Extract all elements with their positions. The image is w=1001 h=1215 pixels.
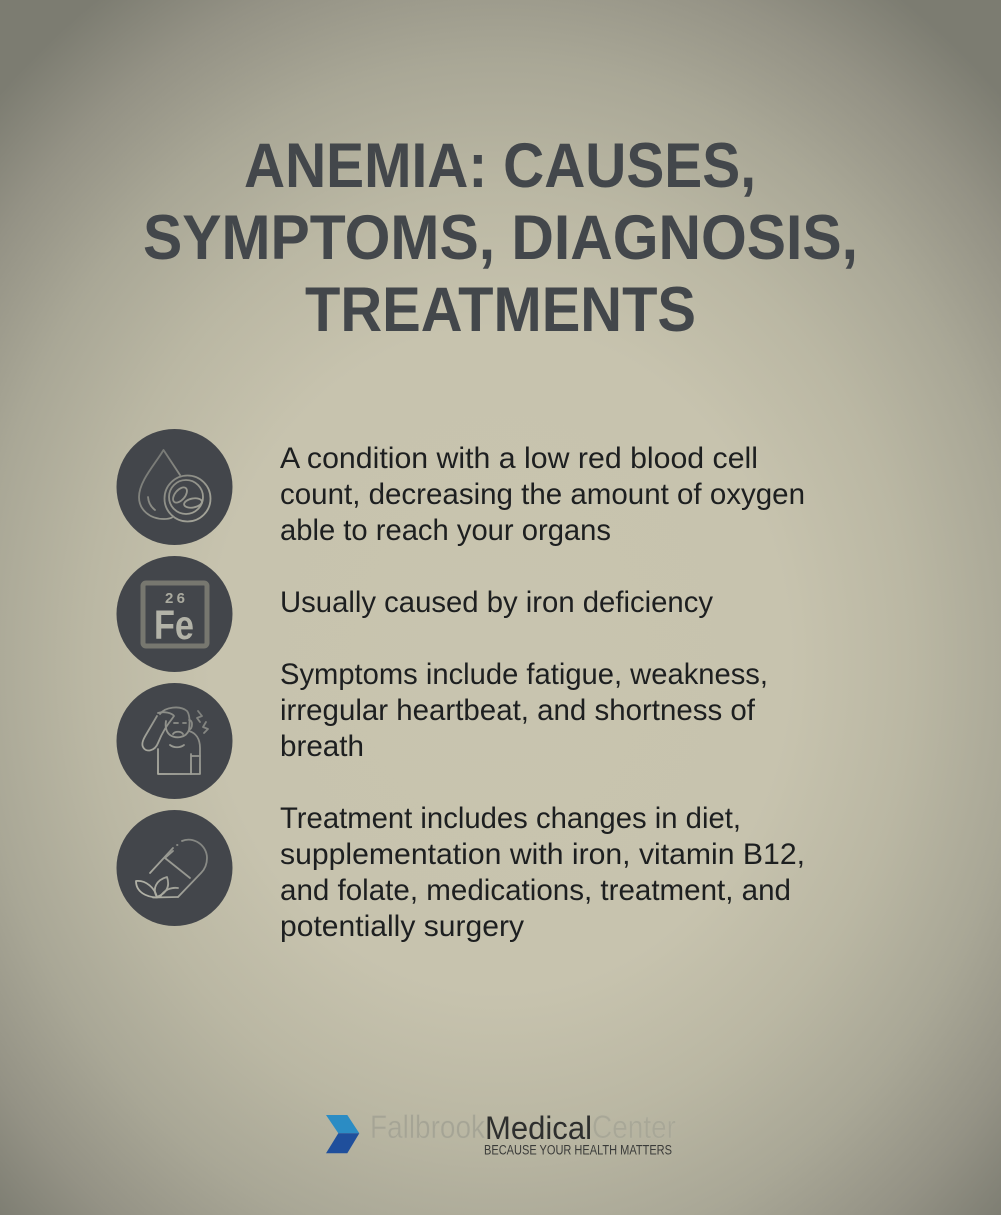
- logo: Fallbrook Medical Center: [326, 1109, 676, 1158]
- icon: logo chevron: [326, 1115, 359, 1153]
- text: symptoms: breath: [280, 730, 364, 763]
- title: ANEMIA: CAUSES,: [244, 131, 756, 201]
- text: treatment: and folate, medications, treatment, and: [280, 874, 791, 907]
- logo: Fallbrook Medical Center: Fallbrook: [370, 1109, 486, 1145]
- title: [143, 131, 858, 345]
- title: TREATMENTS: [305, 275, 696, 345]
- text: treatment: [280, 802, 805, 943]
- text: definition: A condition with a low red blood cell: [280, 442, 758, 475]
- text: cause: Usually caused by iron deficiency: [280, 586, 713, 619]
- icon: blood drop with cells: [116, 429, 232, 545]
- logo: Fallbrook Medical Center: BECAUSE YOUR HEALTH MATTERS: [484, 1142, 672, 1158]
- logo: Fallbrook Medical Center: Medical: [485, 1110, 592, 1146]
- title: SYMPTOMS, DIAGNOSIS,: [143, 203, 858, 273]
- text: treatment: Treatment includes changes in diet,: [280, 802, 741, 835]
- icon: capsule with leaves: [116, 810, 232, 926]
- text: symptoms: irregular heartbeat, and shortness of: [280, 694, 756, 727]
- text: symptoms: [280, 658, 768, 763]
- icon: iron element tile: [116, 556, 232, 672]
- icon: iron element tile: 26: [165, 590, 185, 607]
- text: definition: count, decreasing the amount of oxygen: [280, 478, 805, 511]
- text: symptoms: Symptoms include fatigue, weakness,: [280, 658, 768, 691]
- icon: iron element tile: Fe: [154, 602, 194, 648]
- text: treatment: potentially surgery: [280, 910, 524, 943]
- text: definition: [280, 442, 805, 547]
- text: definition: able to reach your organs: [280, 514, 611, 547]
- text: treatment: supplementation with iron, vitamin B12,: [280, 838, 805, 871]
- logo: Fallbrook Medical Center: Center: [592, 1109, 676, 1145]
- icon: person with headache: [116, 683, 232, 799]
